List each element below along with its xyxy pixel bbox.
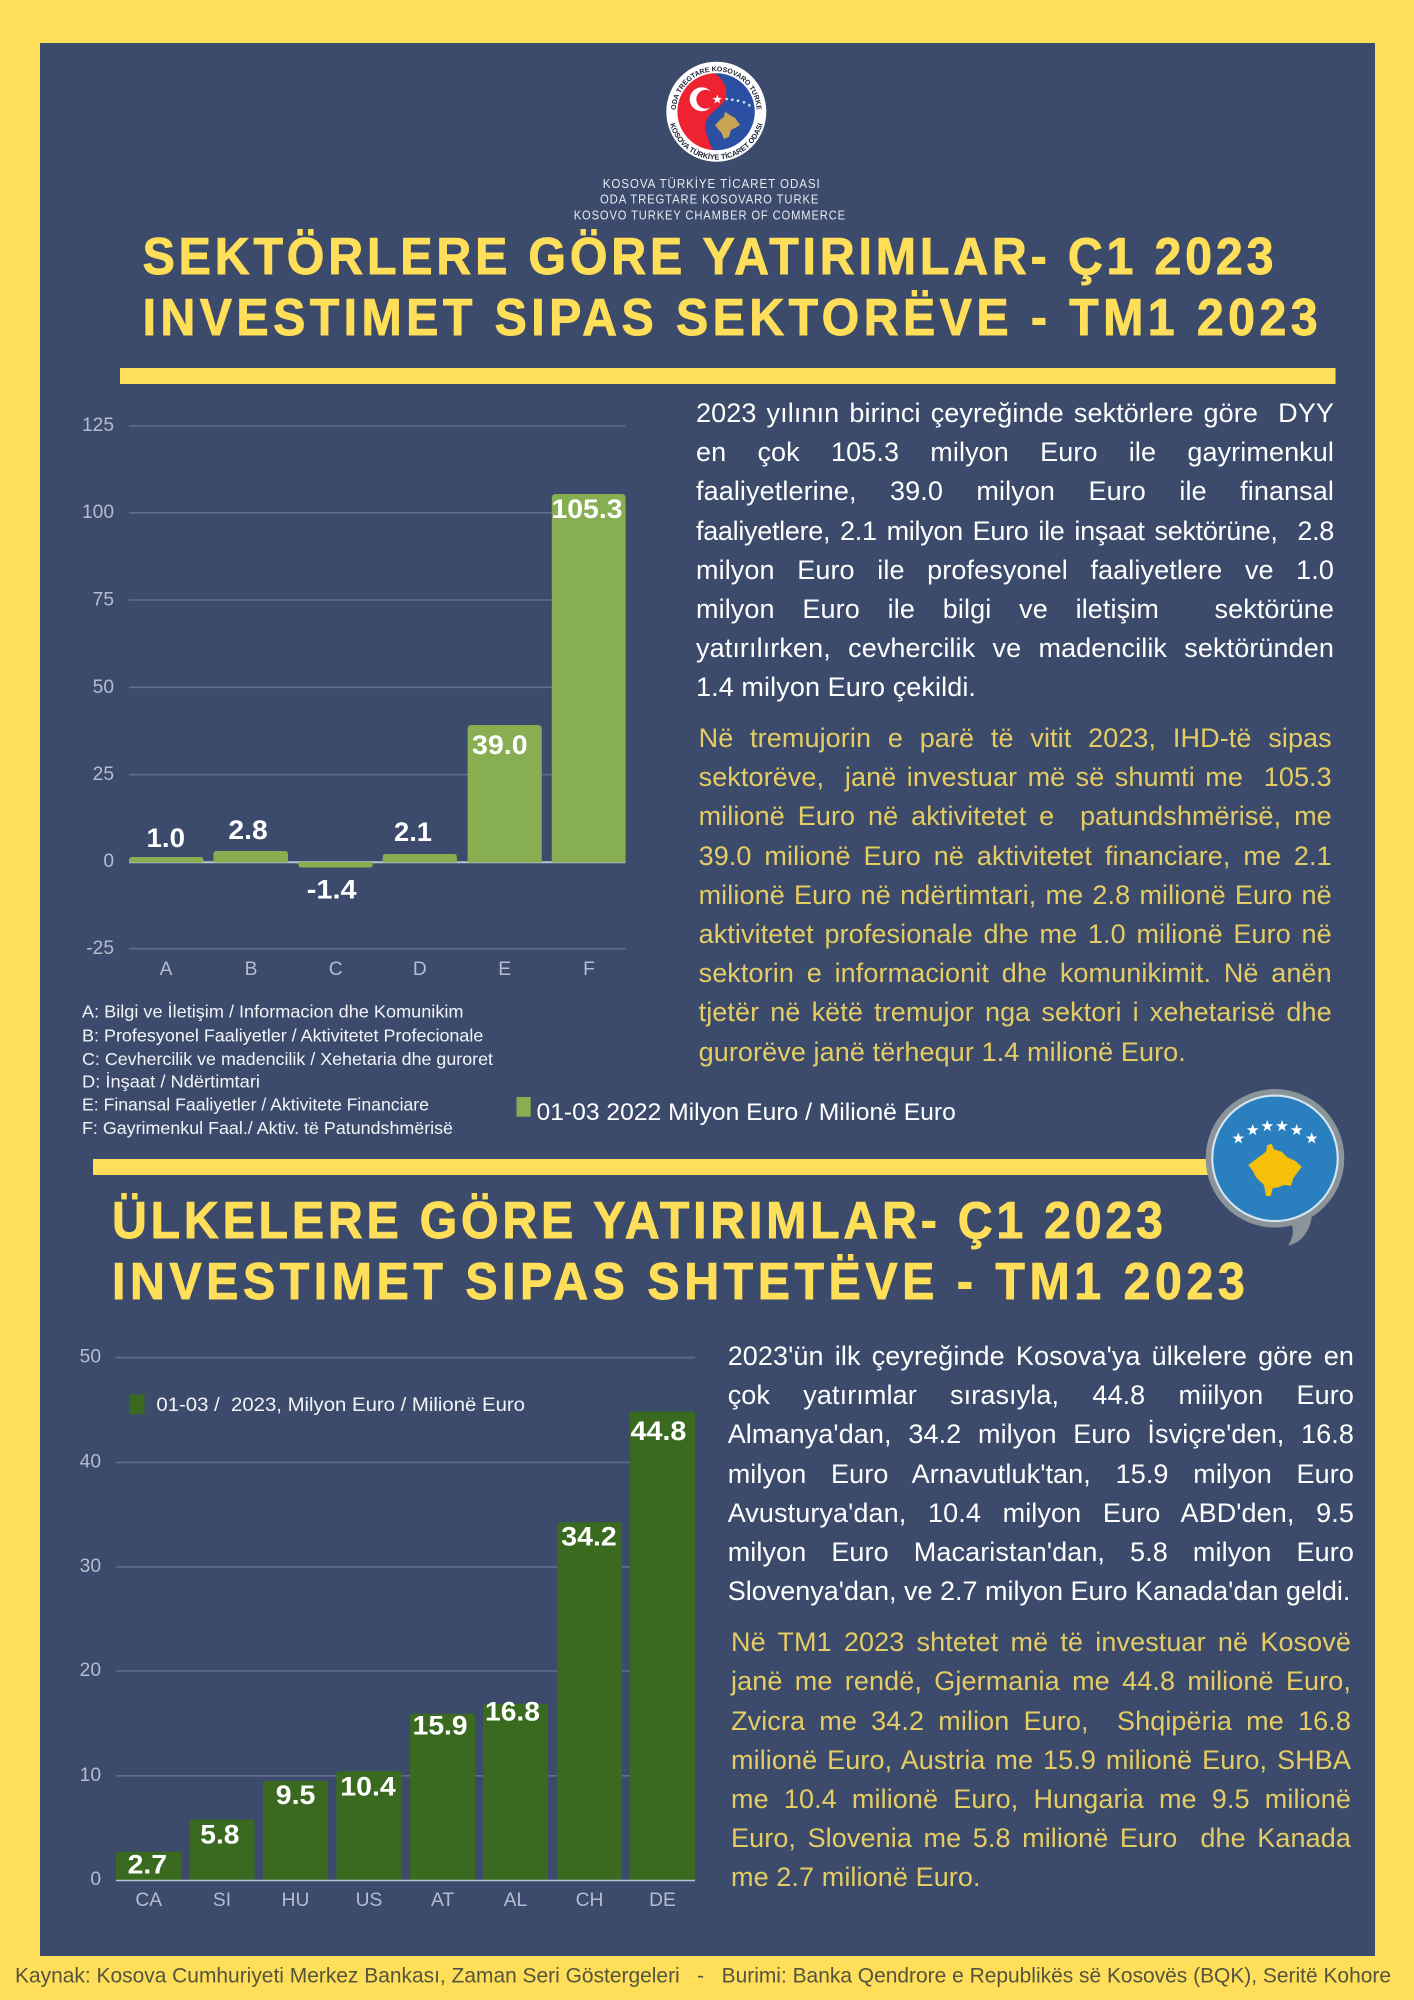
text block: Albanian country summary: me 2.7 milionë Euro. xyxy=(731,1862,981,1892)
text block: Turkish sector summary: faaliyetlerine, 39.0 milyon Euro ile finansal xyxy=(696,476,1334,506)
title: countries: INVESTIMET SIPAS SHTETËVE - TM1 2023 xyxy=(112,1252,1245,1310)
bar chart: countries: 30 xyxy=(80,1556,101,1577)
bar chart: sectors: 50 xyxy=(93,677,114,698)
text block: Turkish country summary: çok yatırımlar sırasıyla, 44.8 miilyon Euro xyxy=(728,1380,1354,1410)
text block: Albanian sector summary: sektorin e informacionit dhe komunikimit. Në anën xyxy=(699,958,1332,988)
text block: Turkish country summary: milyon Euro Macaristan'dan, 5.8 milyon Euro xyxy=(728,1537,1354,1567)
title: sectors: SEKTÖRLERE GÖRE YATIRIMLAR- Ç1 2023 xyxy=(143,227,1273,285)
text block: Turkish sector summary: 1.4 milyon Euro çekildi. xyxy=(696,672,976,702)
bar chart: sectors: 2.8 xyxy=(228,815,268,845)
text block: Albanian sector summary: Në tremujorin e parë të vitit 2023, IHD-të sipas xyxy=(699,723,1332,753)
bar chart: countries: 10 xyxy=(80,1765,101,1786)
bar chart: sectors: 75 xyxy=(93,590,114,610)
legend: sector codes: D: İnşaat / Ndërtimtari xyxy=(82,1072,260,1092)
bar chart: sectors: -25 xyxy=(86,938,114,959)
bar chart: sectors: 25 xyxy=(93,764,114,785)
text block: Albanian sector summary: gurorëve janë tërhequr 1.4 milionë Euro. xyxy=(699,1036,1186,1066)
text block: Turkish sector summary: milyon Euro ile profesyonel faaliyetlere ve 1.0 xyxy=(696,555,1334,585)
bar chart: countries: 16.8 xyxy=(485,1697,540,1727)
bar chart: sectors: 105.3 xyxy=(552,494,622,524)
text block: Turkish sector summary: faaliyetlere, 2.1 milyon Euro ile inşaat sektörüne, 2.8 xyxy=(696,516,1334,546)
bar chart: sectors: 125 xyxy=(82,415,114,436)
bar chart: countries: CH xyxy=(576,1890,603,1911)
bar chart: sectors: E xyxy=(498,959,511,980)
text block: Turkish country summary: 2023'ün ilk çeyreğinde Kosova'ya ülkelere göre en xyxy=(728,1341,1354,1371)
bar chart: sectors: C xyxy=(329,959,343,980)
bar chart: sectors: 2.1 xyxy=(394,817,432,847)
bar chart: countries: AL xyxy=(504,1890,528,1911)
text block: Turkish country summary: milyon Euro Arnavutluk'tan, 15.9 milyon Euro xyxy=(728,1459,1354,1489)
legend: 2023 series: 01-03 / 2023, Milyon Euro / Milionë Euro xyxy=(156,1394,525,1416)
text block: Albanian country summary: Në TM1 2023 shtetet më të investuar në Kosovë xyxy=(731,1627,1351,1657)
text block: Turkish country summary: Slovenya'dan, ve 2.7 milyon Euro Kanada'dan geldi. xyxy=(728,1576,1350,1606)
bar chart: countries: HU xyxy=(282,1890,309,1911)
text block: Albanian country summary: janë me rendë, Gjermania me 44.8 milionë Euro, xyxy=(731,1666,1351,1696)
bar chart: countries: 20 xyxy=(80,1660,101,1681)
bar chart: sectors: 100 xyxy=(82,502,114,523)
text block: Turkish country summary xyxy=(728,1341,1354,1606)
text block: Albanian country summary xyxy=(730,1627,1351,1892)
bar chart: sectors: 0 xyxy=(103,851,114,872)
text block: Turkish country summary: Avusturya'dan, 10.4 milyon Euro ABD'den, 9.5 xyxy=(728,1498,1354,1528)
bar chart: sectors: -1.4 xyxy=(307,875,357,905)
bar chart: sectors: 1.0 xyxy=(146,823,185,853)
legend: 2022 series: 01-03 2022 Milyon Euro / Milionë Euro xyxy=(536,1099,956,1126)
divider bar: sectors xyxy=(120,368,1336,384)
icon: chamber of commerce logo: KOSOVA TÜRKİYE TİCARET ODASI xyxy=(670,122,762,160)
organisation names: ODA TREGTARE KOSOVARO TURKE xyxy=(600,191,819,206)
organisation names: KOSOVO TURKEY CHAMBER OF COMMERCE xyxy=(574,207,846,222)
bar chart: countries: 10.4 xyxy=(340,1772,396,1802)
text block: Albanian country summary: Euro, Slovenia me 5.8 milionë Euro dhe Kanada xyxy=(731,1823,1351,1853)
legend: sector codes: B: Profesyonel Faaliyetler / Aktivitetet Profecionale xyxy=(82,1026,483,1046)
legend: sector codes: E: Finansal Faaliyetler / Aktivitete Financiare xyxy=(82,1095,429,1115)
bar chart: countries: DE xyxy=(649,1890,676,1911)
icon: chamber of commerce logo: ODA TREGTARE KOSOVARO TURKE xyxy=(671,66,762,110)
bar chart: countries: 9.5 xyxy=(276,1780,315,1810)
text block: Albanian country summary: me 10.4 milionë Euro, Hungaria me 9.5 milionë xyxy=(731,1784,1351,1814)
bar chart: sectors: D xyxy=(413,959,427,980)
organisation names: KOSOVA TÜRKİYE TİCARET ODASI xyxy=(603,176,821,191)
text block: Albanian sector summary xyxy=(699,723,1332,1066)
legend: sector codes xyxy=(82,1002,493,1138)
text block: Turkish sector summary: 2023 yılının birinci çeyreğinde sektörlere göre DYY xyxy=(696,398,1334,428)
bar chart: countries: 40 xyxy=(80,1452,101,1472)
text block: Turkish country summary: Almanya'dan, 34.2 milyon Euro İsviçre'den, 16.8 xyxy=(728,1419,1354,1449)
text block: Turkish sector summary: en çok 105.3 milyon Euro ile gayrimenkul xyxy=(696,437,1334,467)
bar chart: countries: CA xyxy=(135,1890,162,1911)
text block: Albanian sector summary: milionë Euro në ndërtimtari, me 2.8 milionë Euro në xyxy=(699,880,1332,910)
title: sectors xyxy=(143,227,1318,346)
title: countries: ÜLKELERE GÖRE YATIRIMLAR- Ç1 2023 xyxy=(112,1191,1163,1249)
bar chart: sectors: F xyxy=(583,959,595,980)
bar chart: countries xyxy=(80,1346,695,1911)
bar chart: sectors: 39.0 xyxy=(472,730,528,760)
text block: Albanian sector summary: tjetër në këtë tremujor nga sektori i xehetarisë dhe xyxy=(699,997,1332,1027)
bar chart: countries: 0 xyxy=(90,1869,101,1890)
source footer: Kaynak: Kosova Cumhuriyeti Merkez Bankası, Zaman Seri Göstergeleri - Burimi: Banka Qendrore e Republikës së Kosovës (BQK), Seritë Kohore xyxy=(15,1965,1391,1988)
title: sectors: INVESTIMET SIPAS SEKTORËVE - TM1 2023 xyxy=(143,288,1318,346)
text block: Albanian sector summary: aktivitetet profesionale dhe me 1.0 milionë Euro në xyxy=(699,919,1332,949)
bar chart: sectors: A xyxy=(160,959,173,980)
organisation names xyxy=(574,176,846,222)
bar chart: sectors xyxy=(82,415,626,980)
bar chart: countries: US xyxy=(356,1890,382,1911)
bar chart: countries: SI xyxy=(213,1890,231,1911)
text block: Albanian sector summary: 39.0 milionë Euro në aktivitetet financiare, me 2.1 xyxy=(699,841,1332,871)
bar chart: sectors: B xyxy=(245,959,257,980)
bar chart: countries: AT xyxy=(431,1890,454,1911)
icon: Kosovo flag speech bubble xyxy=(1206,1089,1344,1246)
bar chart: countries: 15.9 xyxy=(413,1710,468,1740)
legend: sector codes: C: Cevhercilik ve madencilik / Xehetaria dhe guroret xyxy=(82,1049,493,1069)
title: countries xyxy=(112,1191,1245,1310)
divider bar: countries xyxy=(93,1159,1213,1175)
bar chart: countries: 34.2 xyxy=(561,1522,617,1552)
text block: Albanian sector summary: sektorëve, janë investuar më së shumti me 105.3 xyxy=(699,762,1332,792)
text block: Albanian country summary: Zvicra me 34.2 milion Euro, Shqipëria me 16.8 xyxy=(731,1706,1351,1736)
text block: Turkish sector summary xyxy=(696,398,1334,702)
bar chart: countries: 2.7 xyxy=(128,1849,167,1879)
text block: Albanian sector summary: milionë Euro në aktivitetet e patundshmërisë, me xyxy=(699,801,1332,831)
bar chart: countries: 50 xyxy=(80,1346,101,1368)
legend: sector codes: A: Bilgi ve İletişim / Informacion dhe Komunikim xyxy=(82,1002,464,1022)
text block: Albanian country summary: milionë Euro, Austria me 15.9 milionë Euro, SHBA xyxy=(731,1745,1351,1775)
icon: chamber of commerce logo xyxy=(666,62,766,162)
text block: Turkish sector summary: yatırılırken, cevhercilik ve madencilik sektöründen xyxy=(696,633,1334,663)
bar chart: countries: 44.8 xyxy=(630,1416,686,1446)
bar chart: countries: 5.8 xyxy=(200,1820,240,1850)
text block: Turkish sector summary: milyon Euro ile bilgi ve iletişim sektörüne xyxy=(696,594,1334,624)
legend: sector codes: F: Gayrimenkul Faal./ Aktiv. të Patundshmërisë xyxy=(82,1118,453,1138)
